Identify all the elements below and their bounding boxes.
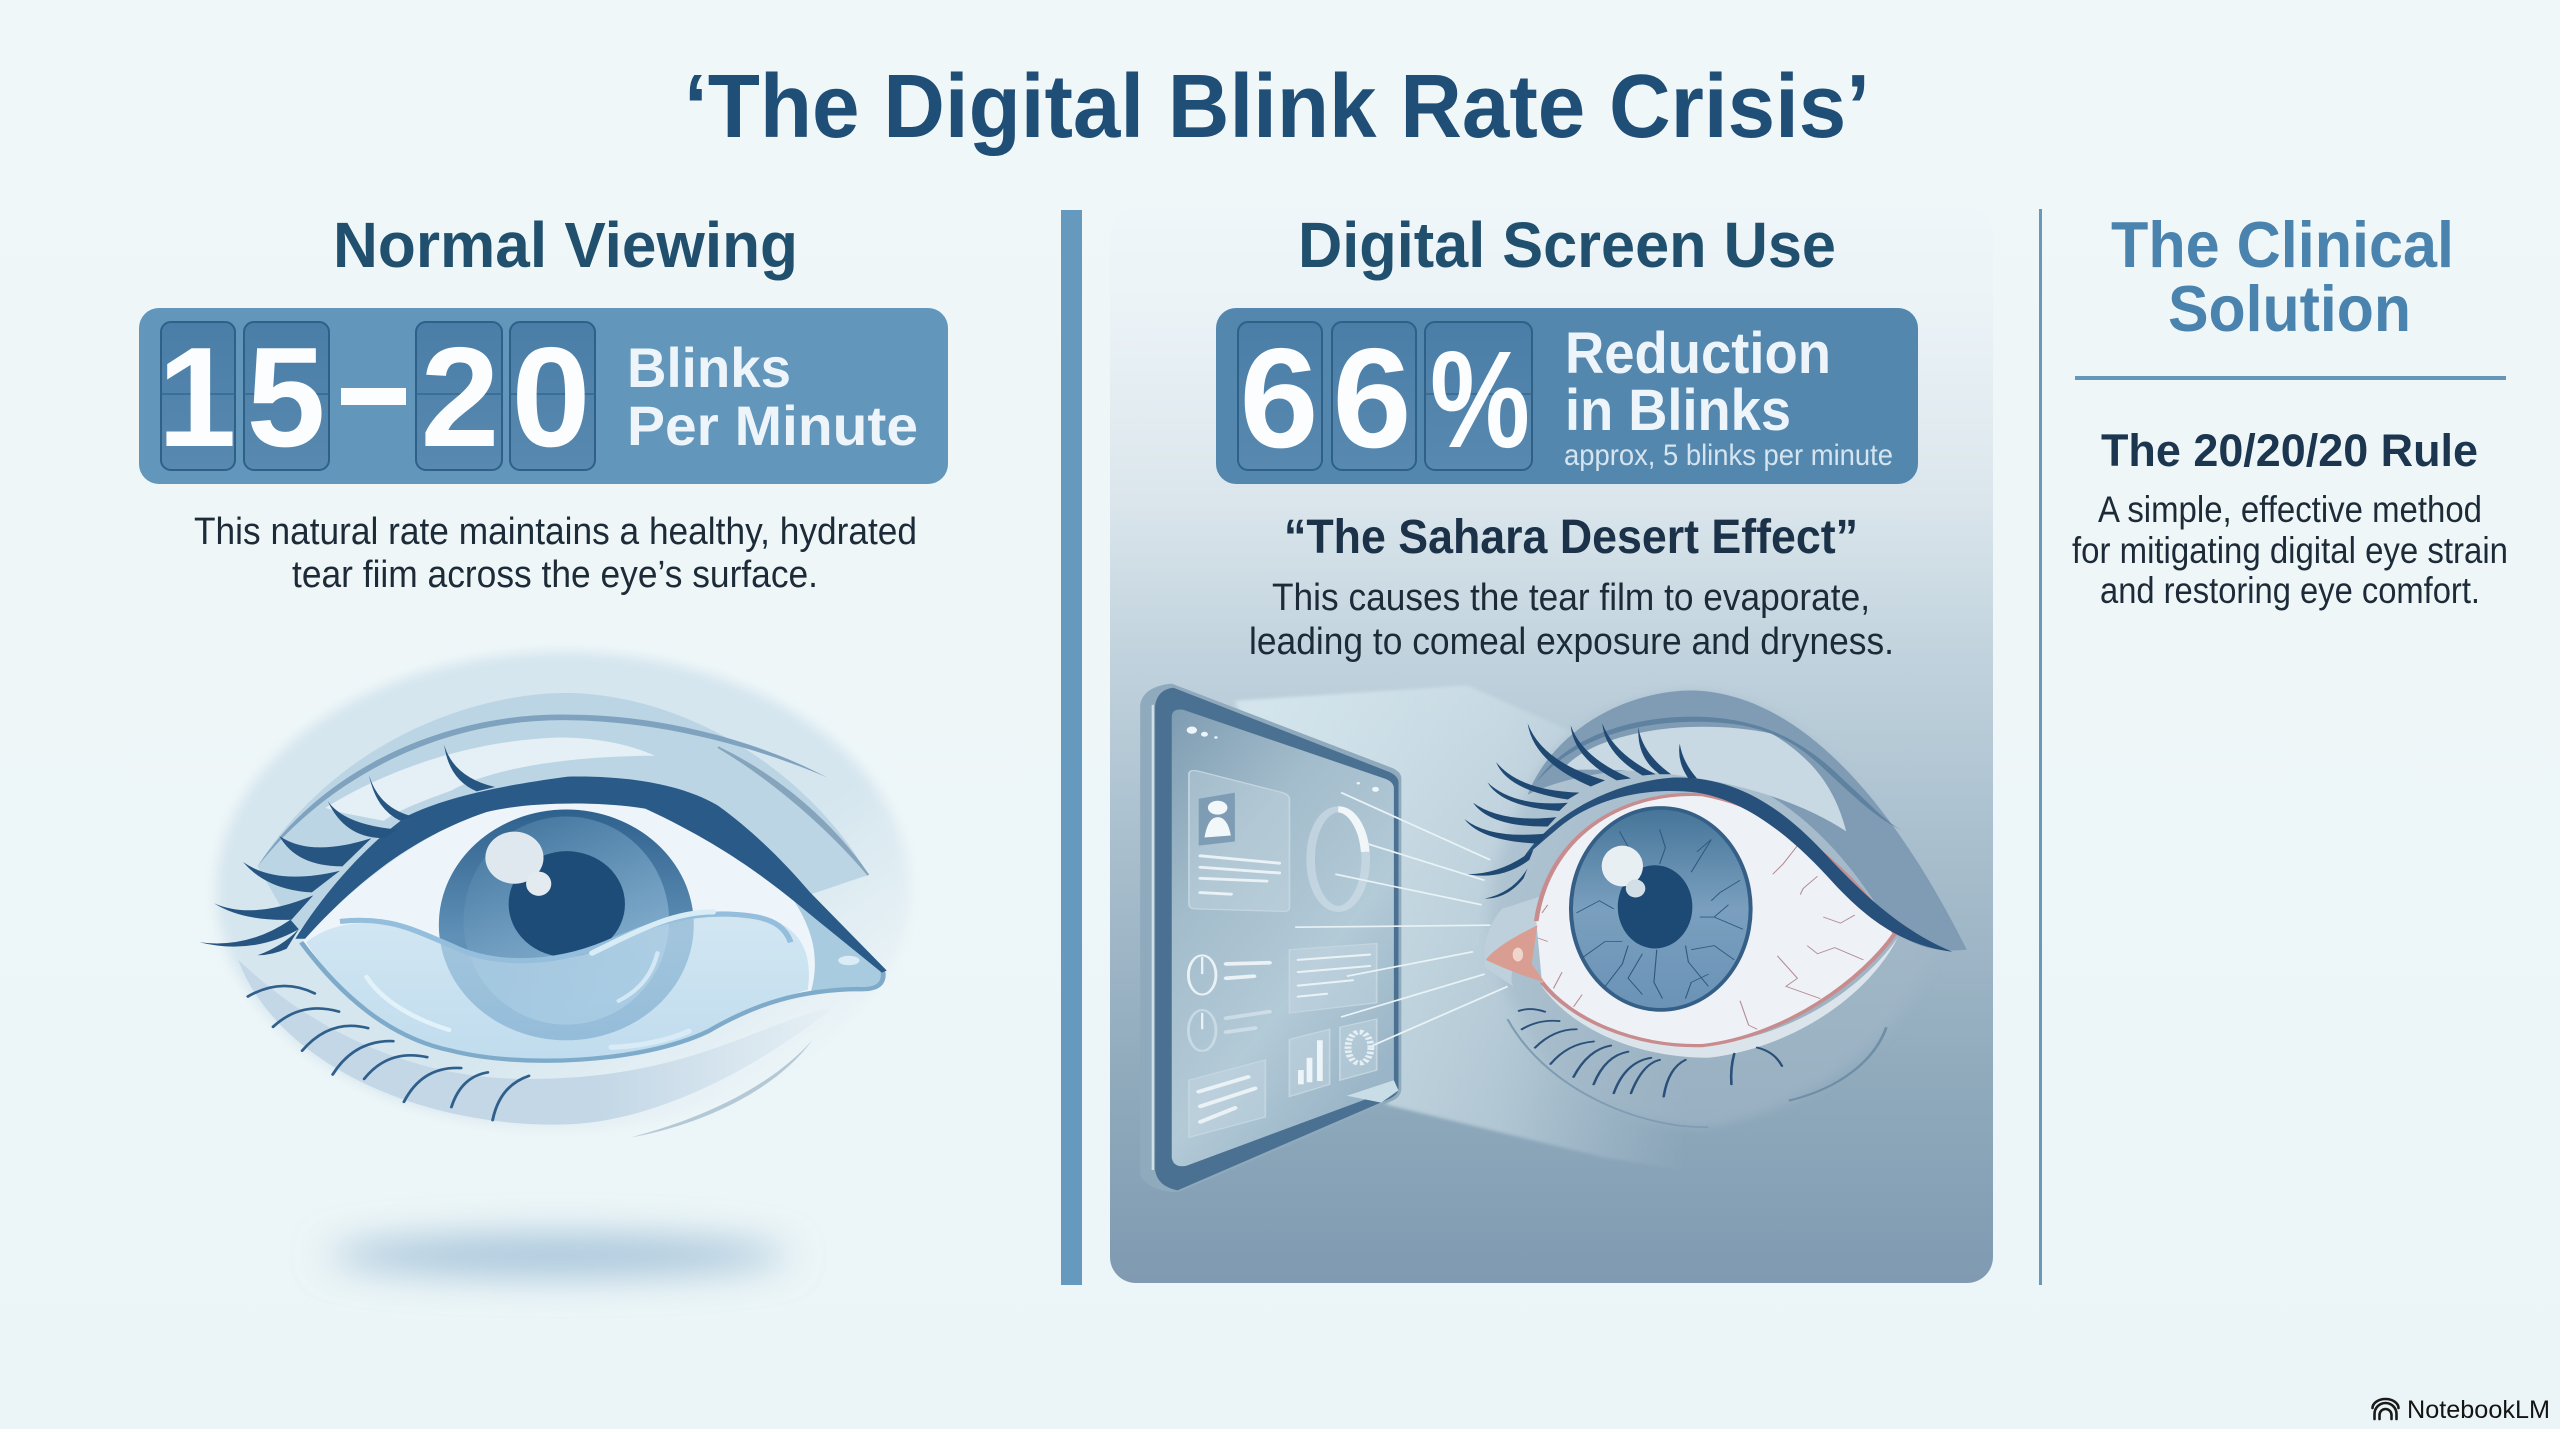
tablet xyxy=(1140,684,1401,1192)
stat banner: 15-20 blinks per minute: Blinks xyxy=(627,336,791,399)
text block: digital use description: leading to comeal exposure and dryness. xyxy=(1249,621,1894,663)
heading: the clinical solution: The Clinical xyxy=(2111,208,2454,281)
stat banner: 15-20 blinks per minute: 2 xyxy=(421,318,499,477)
lower lashes of healthy eye xyxy=(248,986,529,1120)
stat banner: 15-20 blinks per minute xyxy=(139,308,948,484)
stat banner: 66% reduction in blinks: 6 xyxy=(1333,319,1411,478)
text block: normal rate description: This natural rate maintains a healthy, hydrated xyxy=(194,511,917,553)
eye surroundings xyxy=(1484,691,1967,1127)
title: ‘The Digital Blink Rate Crisis’ xyxy=(684,57,1870,157)
logo: NotebookLM: NotebookLM xyxy=(2407,1396,2550,1424)
text block: rule description: and restoring eye comfort. xyxy=(2100,570,2480,611)
stat banner: 66% reduction in blinks: 6 xyxy=(1240,319,1318,478)
stat banner: 66% reduction in blinks: % xyxy=(1430,323,1530,477)
stat banner: 15-20 blinks per minute: 0 xyxy=(512,318,590,477)
subheading: sahara desert effect: “The Sahara Desert Effect” xyxy=(1284,511,1858,564)
stat banner: 15-20 blinks per minute: Per Minute xyxy=(627,394,918,457)
stat banner: 66% reduction in blinks: Reduction xyxy=(1565,321,1831,386)
sclera and iris xyxy=(1486,777,1952,1052)
panel: normal viewing xyxy=(139,209,948,1275)
subheading: 20/20/20 rule: The 20/20/20 Rule xyxy=(2101,425,2478,476)
upper lashes of healthy eye xyxy=(199,745,495,955)
stat banner: 66% reduction in blinks xyxy=(1216,308,1918,484)
lower orbit lines xyxy=(1508,1019,1886,1127)
text block: rule description: for mitigating digital eye strain xyxy=(2072,530,2508,571)
heading: digital screen use: Digital Screen Use xyxy=(1298,209,1836,281)
text block: digital use description: This causes the tear film to evaporate, xyxy=(1272,577,1870,619)
illustration: healthy eye xyxy=(199,652,909,1275)
panel: clinical solution xyxy=(2072,208,2508,611)
stat banner: 15-20 blinks per minute: 5 xyxy=(247,318,325,477)
text block: rule description xyxy=(2072,489,2508,611)
text block: normal rate description xyxy=(194,511,917,596)
panel: digital screen use xyxy=(1110,209,1993,1283)
divider: left bar xyxy=(1061,210,1082,1285)
stat banner: 15-20 blinks per minute: 1 xyxy=(158,318,236,477)
screen light rays xyxy=(1295,793,1508,1046)
lower lashes of dry eye xyxy=(1519,1009,1782,1097)
divider: right line xyxy=(2039,209,2042,1285)
heading: the clinical solution: Solution xyxy=(2168,272,2411,345)
heading: the clinical solution xyxy=(2111,208,2454,345)
illustration: tablet and dry eye xyxy=(1140,684,1967,1192)
text block: digital use description xyxy=(1249,577,1894,663)
text block: normal rate description: tear fiim across the eye’s surface. xyxy=(292,554,818,596)
stat banner: 66% reduction in blinks: in Blinks xyxy=(1565,378,1791,443)
heading: normal viewing: Normal Viewing xyxy=(333,209,798,281)
stat banner: 66% reduction in blinks: approx, 5 blinks per minute xyxy=(1564,439,1893,472)
text block: rule description: A simple, effective method xyxy=(2098,489,2482,530)
panel background xyxy=(1110,209,1993,1283)
upper lashes of dry eye xyxy=(1464,723,1697,899)
